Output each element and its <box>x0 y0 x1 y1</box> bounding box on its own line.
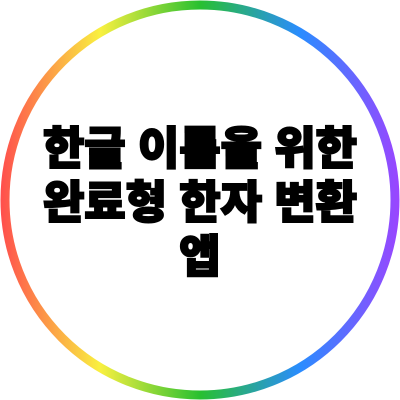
title <box>43 123 357 282</box>
title: 한글 이름을 위한 <box>43 123 357 174</box>
title: 완료형 한자 변환 <box>43 177 357 228</box>
title: 앱 <box>179 231 221 282</box>
